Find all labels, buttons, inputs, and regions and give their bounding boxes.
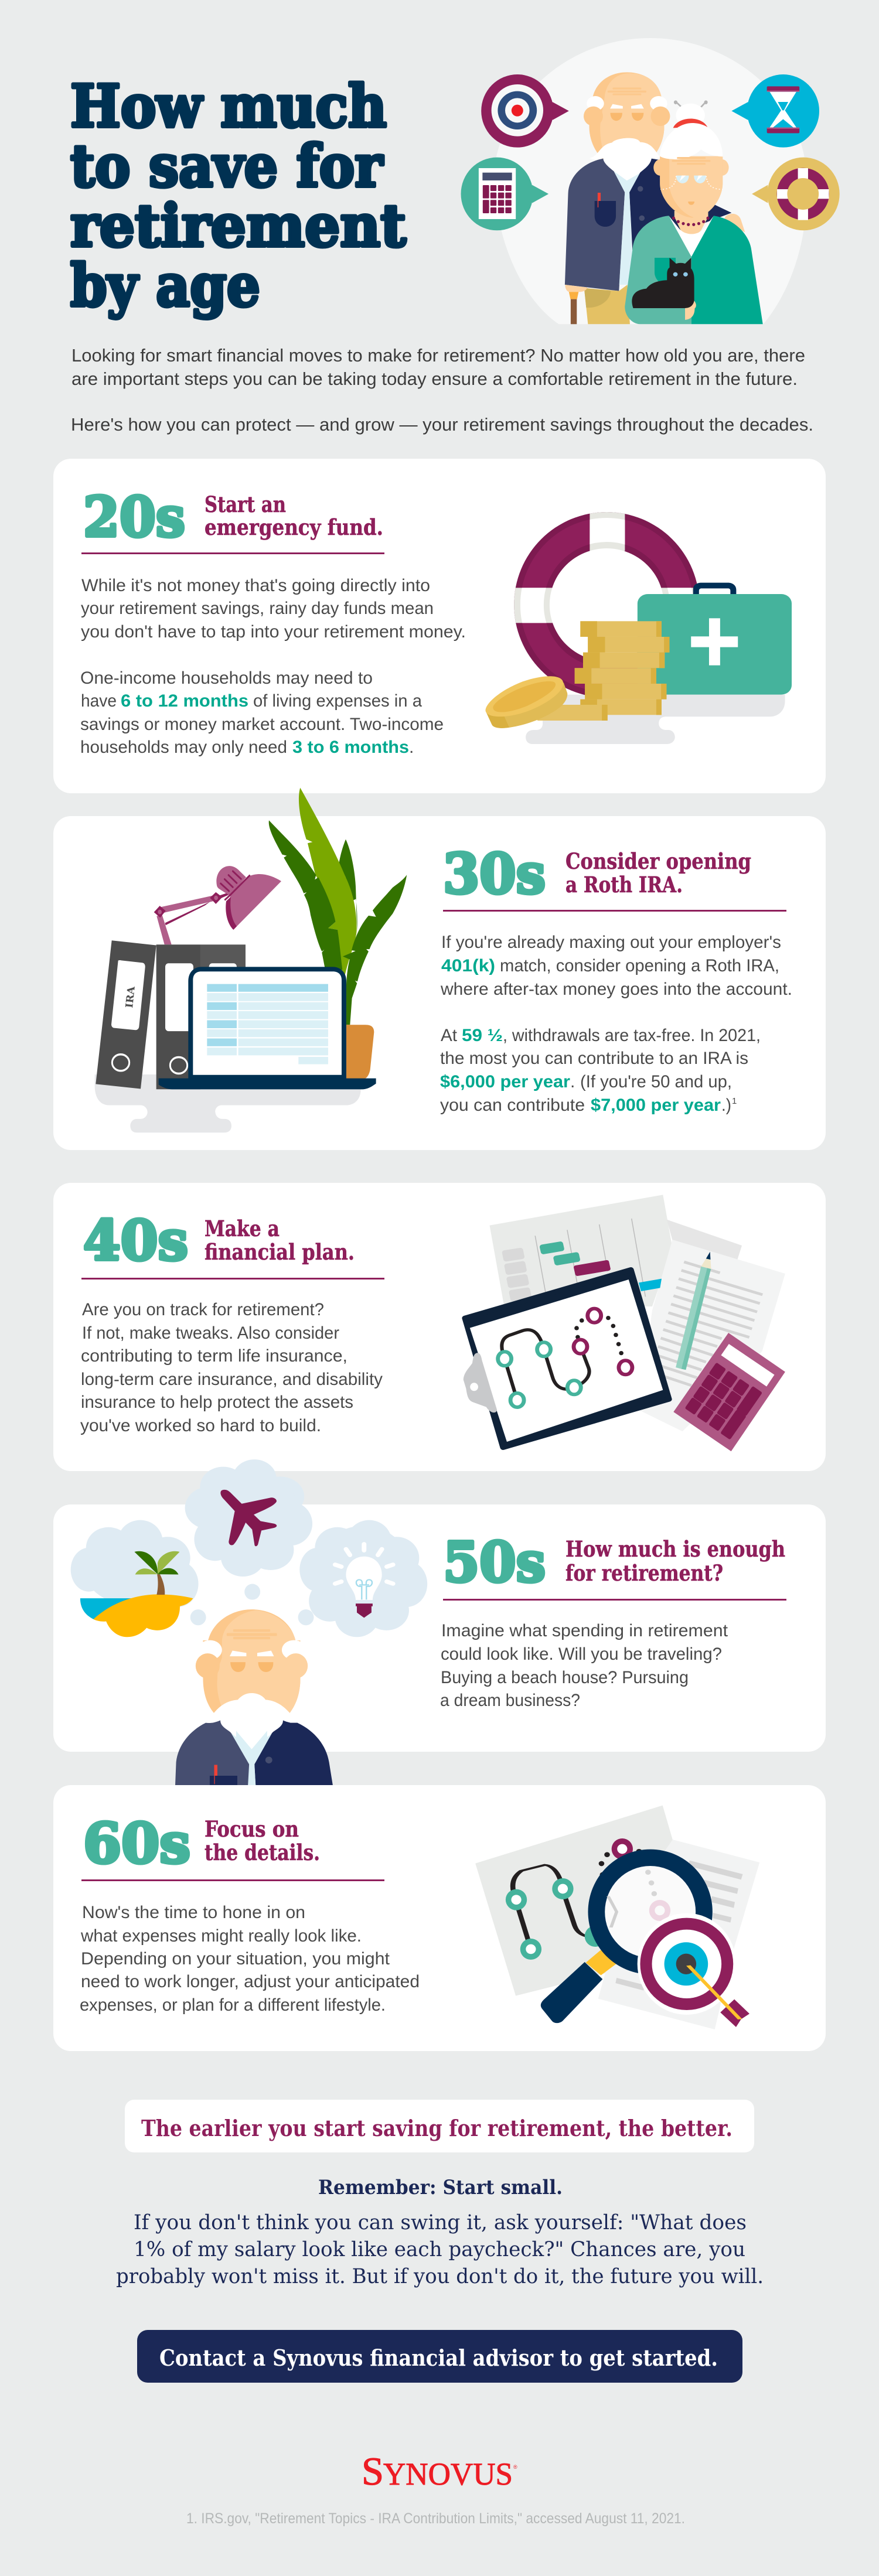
body text: 30s: .) — [721, 1096, 731, 1115]
closing text: probably won't miss it. But if you don't do it, the future you will. — [116, 2265, 764, 2288]
heading: focus on the details: Focus on — [205, 1816, 299, 1842]
closing text — [116, 2211, 764, 2288]
title — [70, 73, 406, 320]
body text: 20s: 3 to 6 months — [292, 738, 409, 757]
body text: 30s: 1 — [732, 1096, 737, 1106]
body text: 40s: contributing to term life insurance, — [81, 1346, 347, 1366]
icon: magnifying glass — [541, 1850, 713, 2023]
body text: 30s: . — [570, 1072, 575, 1091]
panel: 50s — [53, 1459, 826, 1785]
decade label: 60s: 60s — [83, 1811, 190, 1876]
body text: 60s: expenses, or plan for a different lifestyle. — [80, 1995, 386, 2015]
heading: how much is enough for retirement: for retirement? — [565, 1560, 723, 1586]
body text: 30s: At — [441, 1026, 458, 1045]
heading: consider opening a Roth IRA — [565, 848, 751, 898]
body text: 50s: Imagine what spending in retirement — [441, 1621, 728, 1640]
heading: start an emergency fund: emergency fund. — [205, 514, 383, 540]
body text: 30s: the most you can contribute to an IRA is — [440, 1049, 748, 1068]
thought cloud: beach — [71, 1520, 199, 1637]
body text: 50s: could look like. Will you be traveling? — [441, 1644, 722, 1664]
logo: Synovus: ® — [513, 2464, 517, 2470]
logo: Synovus: S — [362, 2449, 384, 2493]
body text: 40s: long-term care insurance, and disability — [81, 1370, 383, 1389]
heading: make a financial plan: Make a — [205, 1216, 280, 1241]
body text: 50s: Buying a beach house? Pursuing — [441, 1668, 689, 1687]
heading: make a financial plan — [205, 1216, 355, 1265]
decade label: 40s: 40s — [83, 1209, 188, 1273]
panel: 60s — [53, 1785, 826, 2051]
body text: 30s: , withdrawals are tax-free. In 2021, — [503, 1026, 761, 1045]
icon: pencil — [676, 1252, 711, 1370]
body text: 20s: One-income households may need to — [80, 668, 373, 688]
title: to save for — [70, 132, 384, 200]
body text: 60s: need to work longer, adjust your anticipated — [81, 1972, 420, 1991]
icon: target and arrow — [638, 1913, 749, 2027]
label: IRA on binder: IRA — [124, 985, 138, 1009]
body text: 40s: If not, make tweaks. Also consider — [82, 1323, 339, 1343]
decade label: 20s: 20s — [83, 485, 185, 550]
footnote: 1. IRS.gov, "Retirement Topics - IRA Contribution Limits," accessed August 11, 2021. — [186, 2510, 685, 2527]
intro text: Looking for smart financial moves to make for retirement? No matter how old you are, there — [71, 345, 805, 366]
body text: 20s: of living expenses in a — [253, 691, 422, 711]
body text: 60s — [80, 1903, 420, 2015]
panel: 30s — [53, 788, 826, 1150]
heading: make a financial plan: financial plan. — [205, 1239, 355, 1265]
body text: 30s: where after-tax money goes into the account. — [440, 980, 792, 999]
body text: 40s — [80, 1300, 383, 1435]
body text: 60s: Now's the time to hone in on — [82, 1903, 305, 1922]
call to action button — [137, 2330, 742, 2383]
title: by age — [70, 252, 260, 320]
body text: 30s: $6,000 per year — [440, 1072, 570, 1091]
heading: focus on the details: the details. — [205, 1840, 320, 1865]
heading: start an emergency fund — [205, 492, 383, 540]
body text: 40s: you've worked so hard to build. — [80, 1416, 321, 1435]
body text: 50s: a dream business? — [440, 1691, 580, 1710]
illustration: man dreaming of retirement — [71, 1459, 427, 1785]
intro text — [71, 345, 813, 435]
decade label: 50s: 50s — [443, 1530, 546, 1595]
body text: 20s: . — [409, 738, 414, 757]
closing text: 1% of my salary look like each paycheck?" Chances are, you — [134, 2238, 745, 2261]
icon: plant — [269, 788, 407, 1079]
callout: the earlier the better — [125, 2100, 754, 2152]
icon: life ring — [512, 510, 701, 698]
man — [565, 72, 745, 324]
icon: calculator bubble — [461, 158, 548, 230]
body text: 30s: If you're already maxing out your employer's — [441, 933, 781, 952]
body text: 30s — [440, 933, 792, 1115]
body text: 30s: (If you're 50 and up, — [580, 1072, 732, 1091]
illustration: life ring, first aid kit and coins — [486, 510, 792, 744]
icon: target bubble — [481, 74, 569, 148]
heading: how much is enough for retirement — [565, 1536, 785, 1586]
thought cloud: light bulb — [299, 1520, 427, 1637]
icon: first aid kit — [638, 583, 792, 695]
body text: 30s: you can contribute — [440, 1096, 585, 1115]
body text: 30s: match, consider opening a Roth IRA, — [500, 956, 779, 975]
illustration: plan on clipboard, papers and calculator — [464, 1195, 785, 1451]
panel: 40s — [53, 1183, 826, 1471]
woman with cat — [625, 100, 763, 324]
logo: Synovus — [362, 2449, 517, 2493]
illustration: binders, lamp, plant and laptop — [95, 788, 407, 1132]
body text: 20s: savings or money market account. Two-income — [80, 715, 444, 734]
body text: 20s — [80, 576, 466, 757]
heading: start an emergency fund: Start an — [205, 492, 286, 517]
icon: desk lamp — [154, 866, 281, 944]
heading: consider opening a Roth IRA: Consider opening — [565, 848, 751, 874]
icon: life ring bubble — [752, 158, 840, 230]
body text: 20s: your retirement savings, rainy day funds mean — [81, 599, 434, 618]
panel: 20s — [53, 459, 826, 793]
title: How much — [70, 73, 387, 141]
icon: laptop — [159, 967, 376, 1089]
call to action button: Contact a Synovus financial advisor to get started. — [159, 2345, 718, 2371]
intro text: Here's how you can protect — and grow — your retirement savings throughout the decades. — [71, 414, 813, 435]
body text: 60s: Depending on your situation, you might — [81, 1949, 390, 1968]
decade label: 30s: 30s — [443, 842, 546, 906]
body text: 30s: 59 ½ — [462, 1026, 503, 1045]
body text: 40s: insurance to help protect the assets — [81, 1393, 353, 1412]
body text: 60s: what expenses might really look like. — [80, 1926, 362, 1946]
body text: 20s: 6 to 12 months — [121, 691, 248, 711]
body text: 30s: 401(k) — [441, 956, 495, 975]
body text: 20s: you don't have to tap into your retirement money. — [81, 622, 466, 642]
body text: 30s: $7,000 per year — [591, 1096, 721, 1115]
icon: coins — [486, 621, 669, 728]
closing text: If you don't think you can swing it, ask yourself: "What does — [134, 2211, 747, 2234]
heading: consider opening a Roth IRA: a Roth IRA. — [565, 872, 683, 898]
hero illustration: retired couple — [461, 38, 840, 324]
body text: 20s: households may only need — [80, 738, 287, 757]
body text: 20s: While it's not money that's going directly into — [81, 576, 430, 595]
intro text: are important steps you can be taking today ensure a comfortable retirement in the future. — [71, 369, 798, 389]
man head and suit — [175, 1609, 333, 1785]
title: retirement — [70, 192, 406, 260]
icon: clipboard — [464, 1270, 669, 1448]
logo: Synovus: YNOVUS — [383, 2456, 513, 2492]
heading: how much is enough for retirement: How much is enough — [565, 1536, 785, 1562]
icon: calculator — [673, 1333, 785, 1451]
body text: 20s: have — [81, 691, 117, 711]
heading: focus on the details — [205, 1816, 320, 1865]
illustration: magnifying glass and target — [475, 1806, 759, 2029]
body text: 40s: Are you on track for retirement? — [82, 1300, 324, 1319]
callout: the earlier the better: The earlier you start saving for retirement, the better. — [141, 2115, 732, 2141]
thought cloud: plane — [185, 1459, 312, 1577]
subheading: remember: Remember: Start small. — [318, 2176, 563, 2199]
icon: binders — [96, 940, 246, 1089]
body text: 50s — [440, 1621, 728, 1710]
icon: hourglass bubble — [731, 74, 819, 148]
